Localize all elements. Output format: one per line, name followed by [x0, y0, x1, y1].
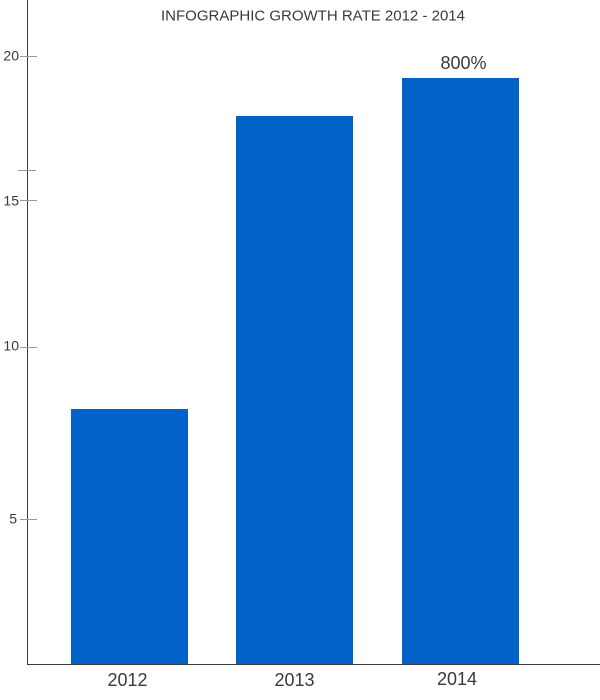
value label: 800%: 800%	[440, 53, 487, 73]
bar: 2012	[71, 409, 188, 664]
bar: 2014	[402, 78, 519, 664]
x label: 2012: 2012	[107, 670, 148, 690]
x label: 2014: 2014	[437, 669, 477, 689]
x axis	[27, 664, 600, 665]
y axis with ticks and labels: 10	[3, 338, 19, 354]
y axis with ticks and labels: 5	[9, 510, 17, 526]
bar: 2013	[236, 116, 353, 664]
title: INFOGRAPHIC GROWTH RATE 2012 - 2014	[161, 8, 465, 24]
x label: 2013: 2013	[274, 670, 315, 690]
y axis with ticks and labels: 20	[3, 48, 19, 64]
y axis with ticks and labels: 15	[3, 192, 19, 208]
y axis with ticks and labels	[3, 0, 37, 664]
